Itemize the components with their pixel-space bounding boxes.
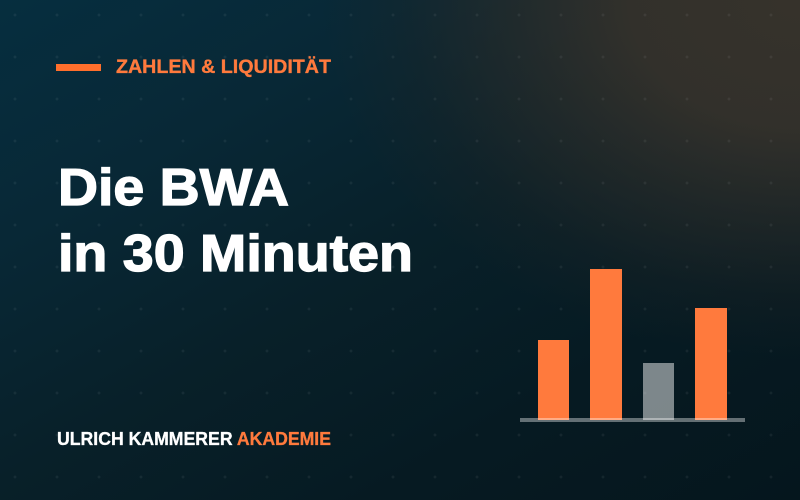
kicker accent bar (56, 64, 101, 71)
bar 4 (695, 308, 727, 420)
footer brand: ULRICH KAMMERER AKADEMIE (57, 429, 331, 449)
kicker: category label (56, 57, 331, 78)
title (58, 159, 413, 283)
bar 3 (grey) (643, 363, 674, 420)
chart baseline (520, 418, 745, 422)
title: in 30 Minuten (58, 225, 413, 283)
bar 1 (538, 340, 569, 420)
title: Die BWA (58, 159, 289, 217)
bar 2 (590, 269, 622, 420)
bar chart (520, 269, 745, 422)
kicker text: ZAHLEN & LIQUIDITÄT (116, 57, 331, 78)
